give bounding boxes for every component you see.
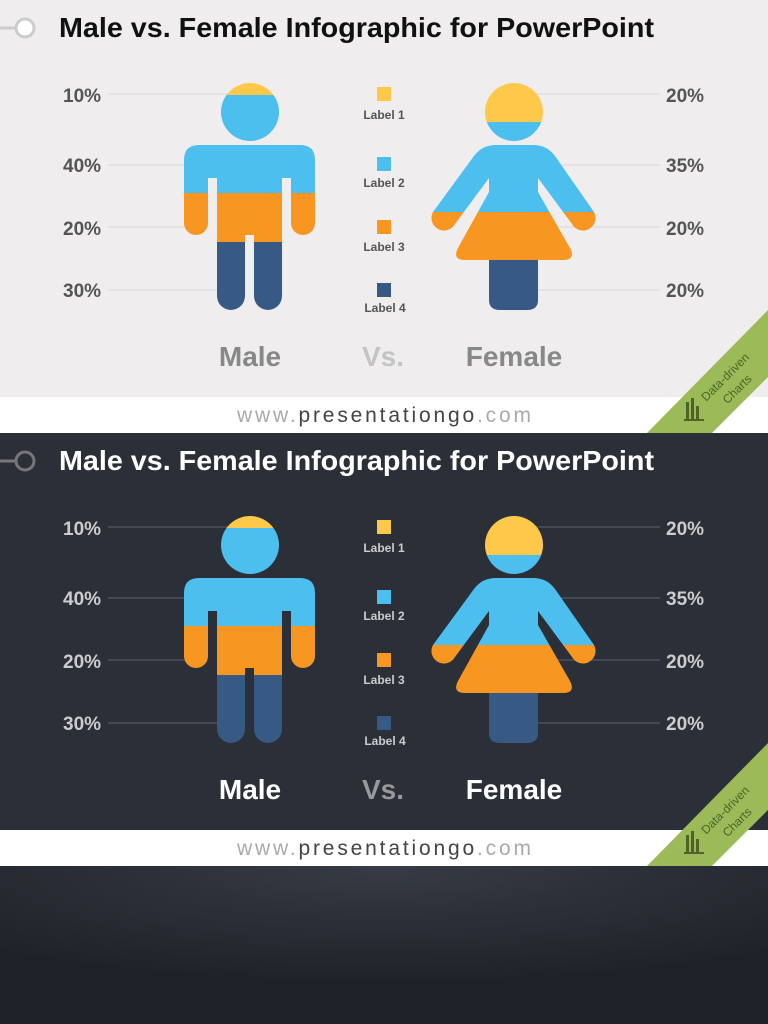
legend: Label 2 [363,609,405,623]
legend: Label 4 [364,734,406,748]
legend: Label 1 [363,108,405,122]
category labels: Female [466,774,562,805]
legend: Label 3 [363,240,405,254]
leader lines [108,94,660,290]
female percentages [666,86,704,302]
ribbon: data-driven charts [647,310,768,433]
leader lines [108,527,660,723]
ribbon: data-driven charts [647,743,768,866]
category labels: Male [219,774,281,805]
female percentages: 20% [666,652,704,673]
ribbon: data-driven charts: Data-driven [698,350,752,404]
male percentages: 10% [63,519,101,540]
female percentages: 20% [666,86,704,107]
legend [363,520,406,748]
category labels [219,341,562,372]
male percentages [63,519,101,735]
title icon [0,452,34,470]
female percentages: 20% [666,219,704,240]
legend: Label 4 [364,301,406,315]
male percentages [63,86,101,302]
panel: light version [0,12,768,433]
legend: Label 1 [363,541,405,555]
female percentages: 20% [666,519,704,540]
male percentages: 30% [63,281,101,302]
legend: Label 3 [363,673,405,687]
ribbon: data-driven charts: Charts [720,805,755,840]
female percentages: 35% [666,589,704,610]
category labels: Vs. [362,341,404,372]
category labels [219,774,562,805]
female percentages: 20% [666,714,704,735]
male percentages: 20% [63,652,101,673]
title icon [0,19,34,37]
female percentages: 20% [666,281,704,302]
title: Male vs. Female Infographic for PowerPoint [59,445,654,476]
title: Male vs. Female Infographic for PowerPoint [59,12,654,43]
url: www.presentationgo.com [236,837,531,860]
legend: Label 2 [363,176,405,190]
male percentages: 40% [63,156,101,177]
male percentages: 20% [63,219,101,240]
female figure [430,513,600,745]
male percentages: 10% [63,86,101,107]
url: www.presentationgo.com [236,404,531,427]
category labels: Male [219,341,281,372]
ribbon: data-driven charts: Charts [720,372,755,407]
category labels: Female [466,341,562,372]
female percentages: 35% [666,156,704,177]
female figure [430,80,600,312]
male figure [180,513,320,745]
legend [363,87,406,315]
female percentages [666,519,704,735]
category labels: Vs. [362,774,404,805]
panel: dark version [0,445,768,866]
male percentages: 40% [63,589,101,610]
male figure [180,80,320,312]
ribbon: data-driven charts: Data-driven [698,783,752,837]
male percentages: 30% [63,714,101,735]
